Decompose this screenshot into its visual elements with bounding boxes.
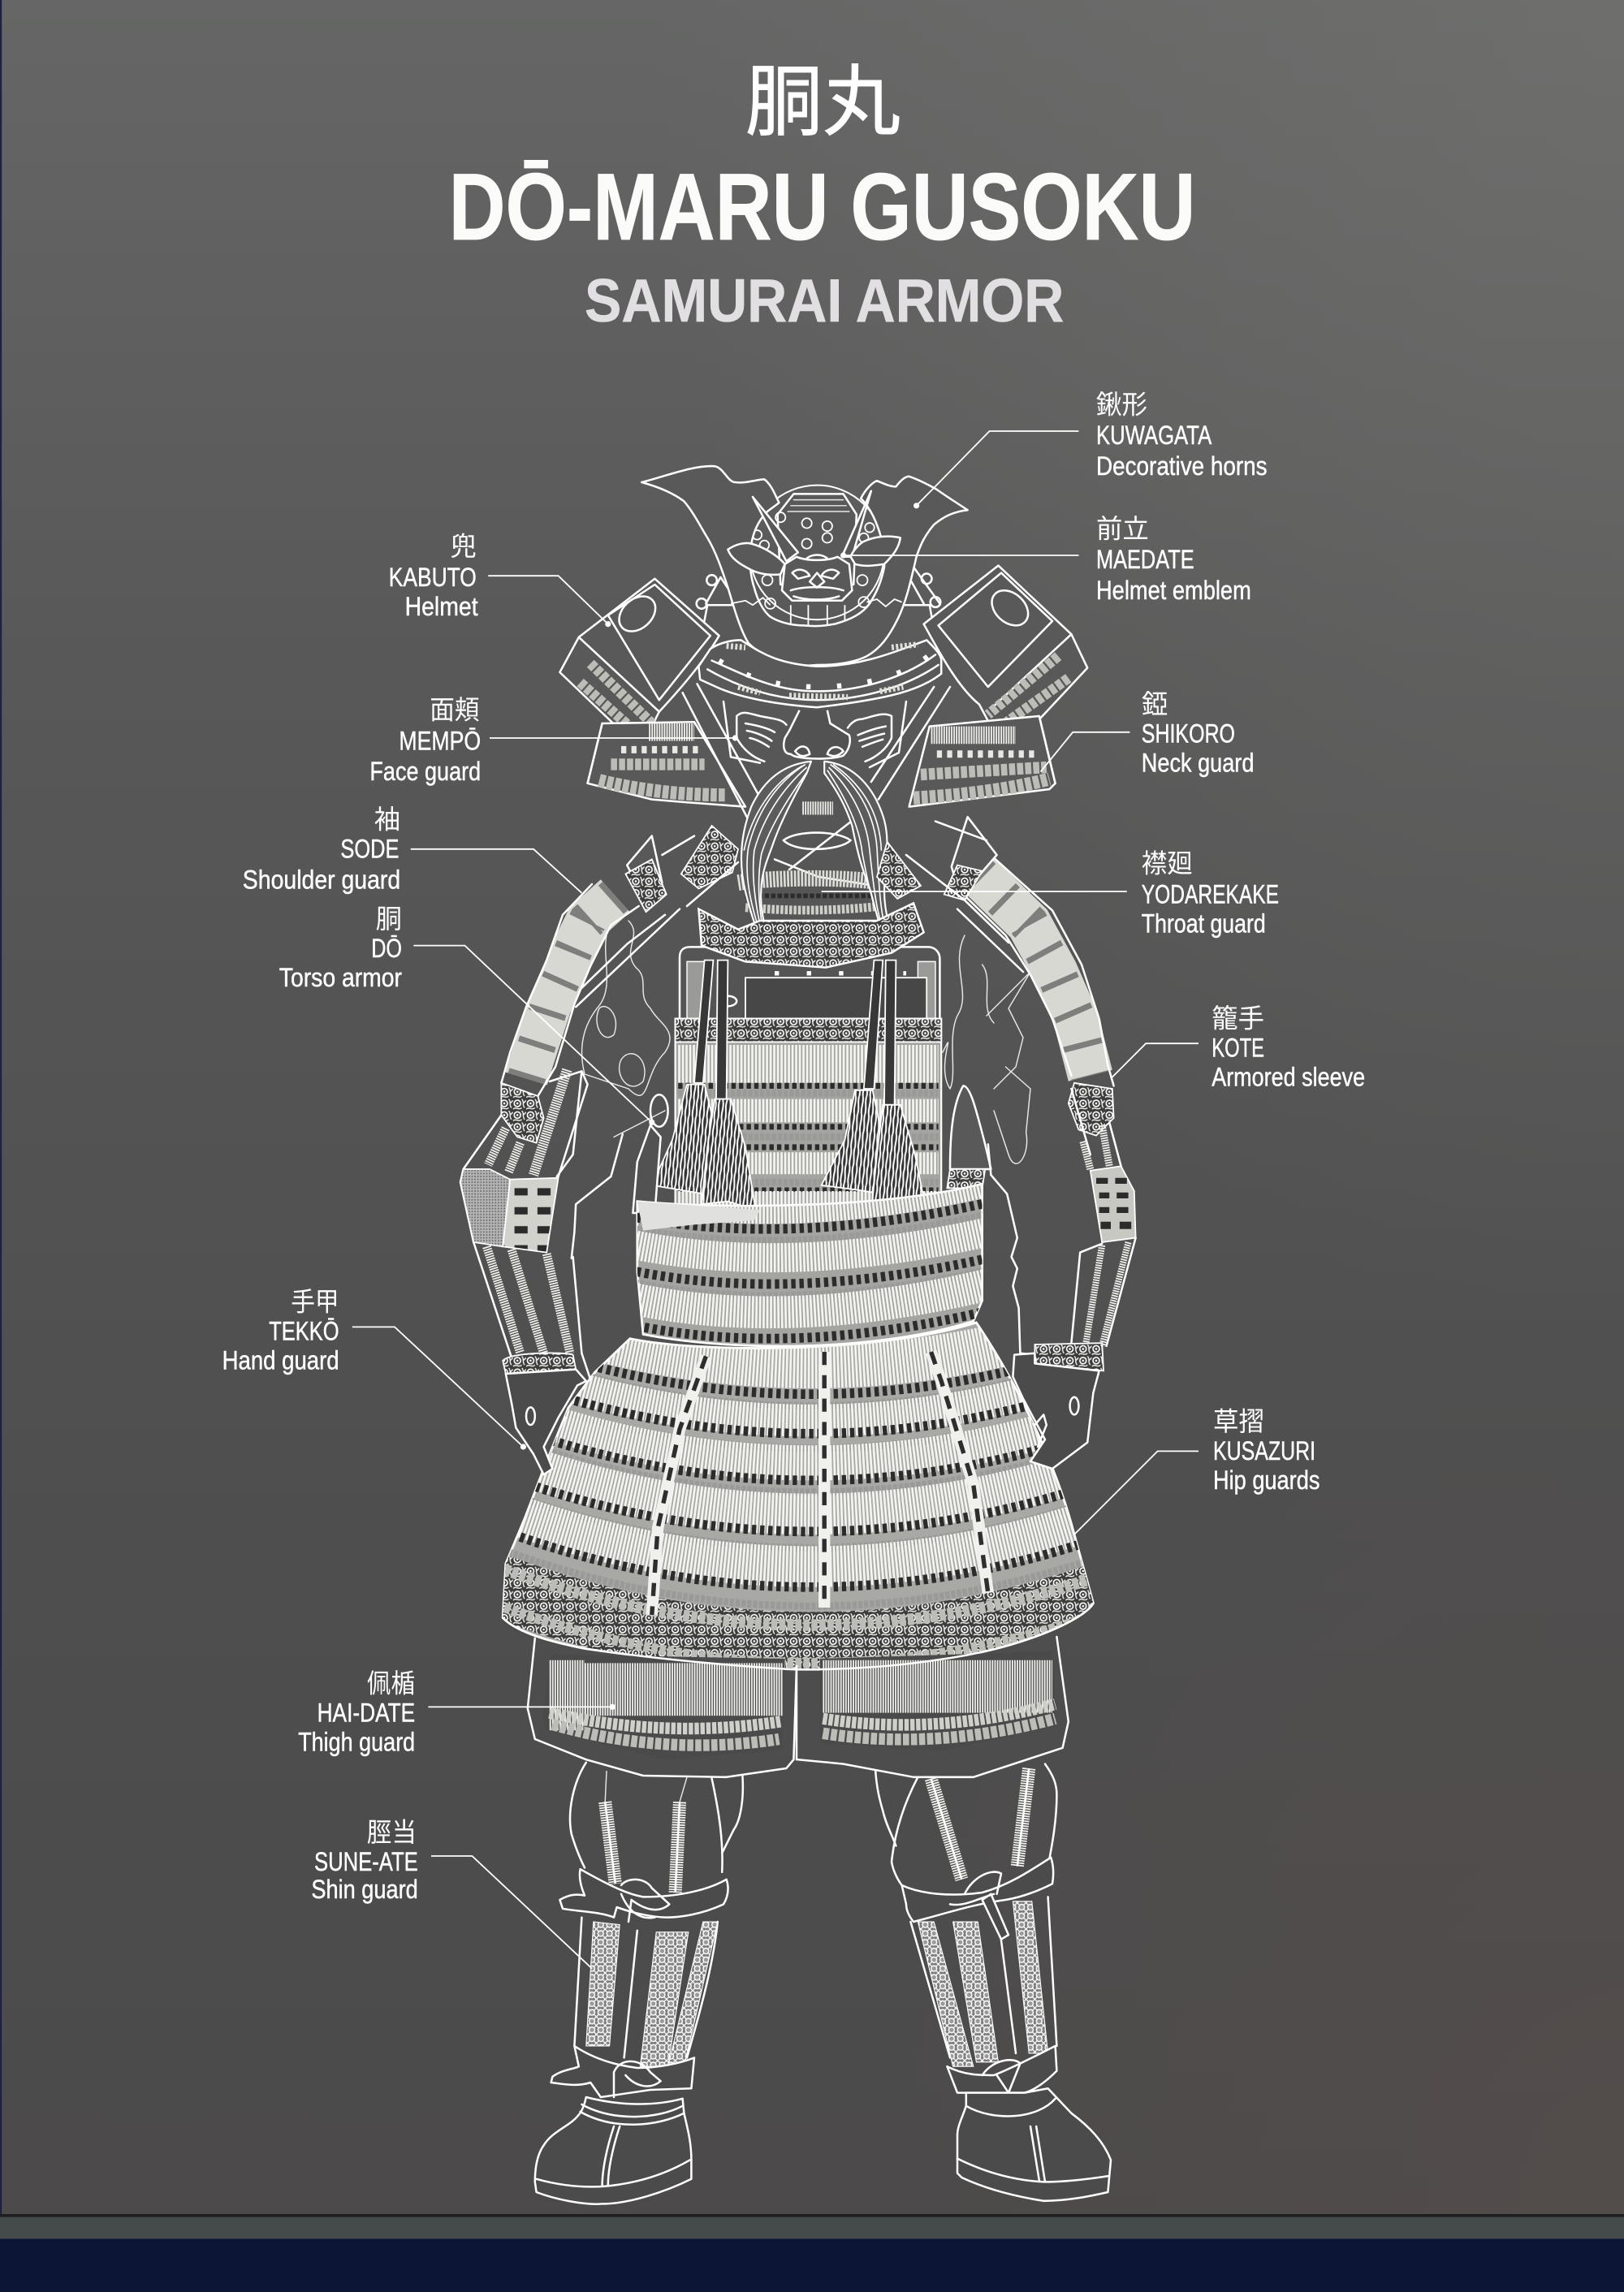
callout: sune-ate	[311, 1818, 592, 1969]
callout: kusazuri	[1074, 1407, 1320, 1534]
left arm: kote and forearm	[460, 1070, 590, 1474]
torso: cloud brocade	[581, 921, 1030, 1163]
maedate: disc behind emblem	[749, 486, 884, 625]
callout: kusazuri: 草摺	[1213, 1407, 1264, 1436]
helmet: bowl struts	[697, 567, 940, 643]
callout: yodarekake: 襟廻	[1142, 849, 1193, 878]
callout: kote	[1111, 1004, 1365, 1091]
callout: mempo	[369, 696, 738, 786]
callout: kabuto: KABUTO	[389, 563, 477, 592]
callout: kote: KOTE	[1212, 1033, 1264, 1062]
left sode: shoulder sleeve	[501, 884, 639, 1096]
side fittings	[550, 1071, 1034, 1355]
callout: hai-date	[298, 1668, 615, 1756]
callout: tekko	[222, 1288, 526, 1450]
callout: kuwagata: 鍬形	[1096, 390, 1147, 419]
callout: kabuto	[389, 532, 611, 627]
callout: yodarekake: YODAREKAKE	[1142, 879, 1279, 909]
shoulder straps and ornate plates	[576, 817, 1023, 1007]
callout: kote: Armored sleeve	[1212, 1062, 1365, 1091]
callout: sune-ate: Shin guard	[311, 1875, 418, 1904]
gorget: ornate collar	[698, 903, 924, 968]
callout: tekko: TEKKŌ	[269, 1317, 339, 1346]
callout: shikoro: 錏	[1142, 689, 1168, 719]
callout: kuwagata: Decorative horns	[1096, 451, 1268, 481]
callout: mempo: 面頬	[430, 696, 479, 725]
callout: shikoro: SHIKORO	[1142, 719, 1235, 748]
kusazuri: hem edge	[503, 1604, 1093, 1669]
mempo: mouth and chin	[775, 808, 874, 886]
shikoro: neck guard plates	[588, 716, 1056, 807]
callout: sode: 袖	[374, 805, 400, 835]
callout: do: DŌ	[371, 934, 402, 963]
callout: kuwagata: KUWAGATA	[1096, 421, 1212, 450]
callout: tekko: 手甲	[291, 1288, 339, 1317]
callout: hai-date: Thigh guard	[298, 1727, 415, 1756]
callout: maedate: Helmet emblem	[1096, 576, 1251, 605]
callout: sode: SODE	[340, 835, 399, 864]
callout: do	[279, 904, 654, 1125]
callout: maedate: MAEDATE	[1096, 545, 1194, 574]
chest: lace panel	[676, 1019, 941, 1210]
callout: maedate: 前立	[1096, 514, 1149, 543]
callout: mempo: MEMPŌ	[399, 726, 481, 755]
callout: shikoro: Neck guard	[1142, 748, 1254, 777]
helmet: right fukigaeshi	[924, 566, 1087, 735]
callout: sode	[243, 805, 581, 894]
armor illustration	[460, 466, 1136, 2204]
right leg: thigh	[875, 1764, 1056, 1885]
right leg: ankle tie and shoe	[947, 2046, 1111, 2201]
subtitle: SAMURAI ARMOR	[585, 267, 1064, 335]
helmet: left fukigaeshi	[559, 579, 719, 738]
callout: kote: 籠手	[1212, 1004, 1264, 1033]
callout: kabuto: Helmet	[405, 592, 478, 621]
callout: do: 胴	[376, 904, 402, 934]
tassels and cords	[652, 960, 926, 1213]
kuwagata: decorative horns	[641, 466, 968, 666]
left leg: ankle tie and shoe	[535, 2046, 694, 2204]
callout: kusazuri: Hip guards	[1213, 1465, 1320, 1495]
left leg: thigh	[570, 1763, 743, 1893]
callout: mempo: Face guard	[369, 757, 481, 786]
yodarekake: throat guard	[738, 878, 884, 910]
callout: shikoro	[1041, 689, 1254, 777]
haidate: right thigh guard	[797, 1637, 1069, 1777]
maedate: dragon emblem	[728, 491, 902, 606]
right arm: kote and forearm	[1013, 1083, 1136, 1469]
right sode: shoulder sleeve	[959, 858, 1114, 1086]
callout: kuwagata	[914, 390, 1268, 508]
callout: yodarekake	[822, 849, 1279, 938]
title: kanji: 胴丸	[745, 59, 901, 145]
callout: yodarekake: Throat guard	[1142, 909, 1266, 938]
kusazuri: hip guard skirt	[497, 1308, 1125, 1669]
callout: hai-date: 佩楯	[367, 1668, 415, 1698]
left leg: knee tie	[559, 1869, 728, 1922]
chest: frame	[680, 947, 939, 1019]
mempo: face guard	[683, 684, 950, 820]
bottom shelf and navy band	[0, 2214, 1624, 2292]
right leg: shin guard	[910, 1897, 1056, 2066]
callout: tekko: Hand guard	[222, 1346, 339, 1375]
callout: kabuto: 兜	[450, 532, 477, 561]
helmet: brim	[698, 640, 941, 707]
mempo: moustache	[741, 762, 888, 934]
callout: kusazuri: KUSAZURI	[1213, 1436, 1315, 1465]
callout: sune-ate: 脛当	[367, 1818, 417, 1847]
do: torso lace	[628, 1182, 994, 1346]
callout: sode: Shoulder guard	[243, 865, 400, 894]
left leg: shin guard	[574, 1918, 718, 2066]
callout: hai-date: HAI-DATE	[317, 1698, 415, 1727]
title: Do-maru Gusoku: DŌ-MARU GUSOKU	[449, 153, 1195, 260]
callout: do: Torso armor	[279, 963, 402, 992]
right leg: knee tie	[902, 1858, 1053, 1940]
callout: sune-ate: SUNE-ATE	[314, 1847, 418, 1876]
haidate: left thigh guard	[528, 1638, 797, 1777]
callout: maedate	[840, 514, 1251, 605]
